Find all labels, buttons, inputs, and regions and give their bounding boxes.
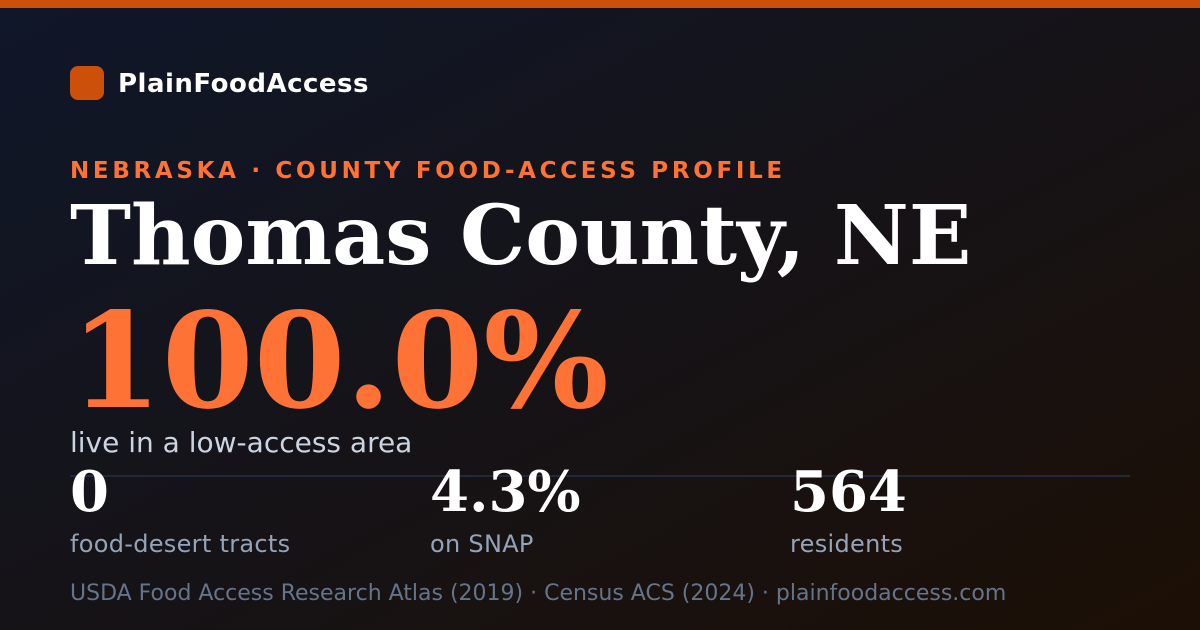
stat value: 564 [790, 459, 907, 525]
source footer: USDA Food Access Research Atlas (2019) · Census ACS (2024) · plainfoodaccess.com [70, 581, 1006, 606]
stat: on SNAP [430, 459, 581, 558]
stat value: 4.3% [430, 459, 581, 525]
brand name: PlainFoodAccess [118, 69, 369, 99]
top accent bar [0, 0, 1200, 8]
stat label: food-desert tracts [70, 530, 290, 558]
stat label: residents [790, 530, 903, 558]
icon: brand square [70, 66, 104, 100]
stat: food-desert tracts [70, 459, 290, 558]
stat label: on SNAP [430, 530, 534, 558]
headline statistic: 100.0% [70, 284, 609, 439]
stat value: 0 [70, 459, 109, 525]
eyebrow heading: NEBRASKA · COUNTY FOOD-ACCESS PROFILE [70, 158, 786, 184]
stat: residents [790, 459, 907, 558]
title: Thomas County, NE [70, 188, 971, 284]
brand logo [70, 66, 369, 100]
headline statistic caption: live in a low-access area [70, 426, 412, 459]
